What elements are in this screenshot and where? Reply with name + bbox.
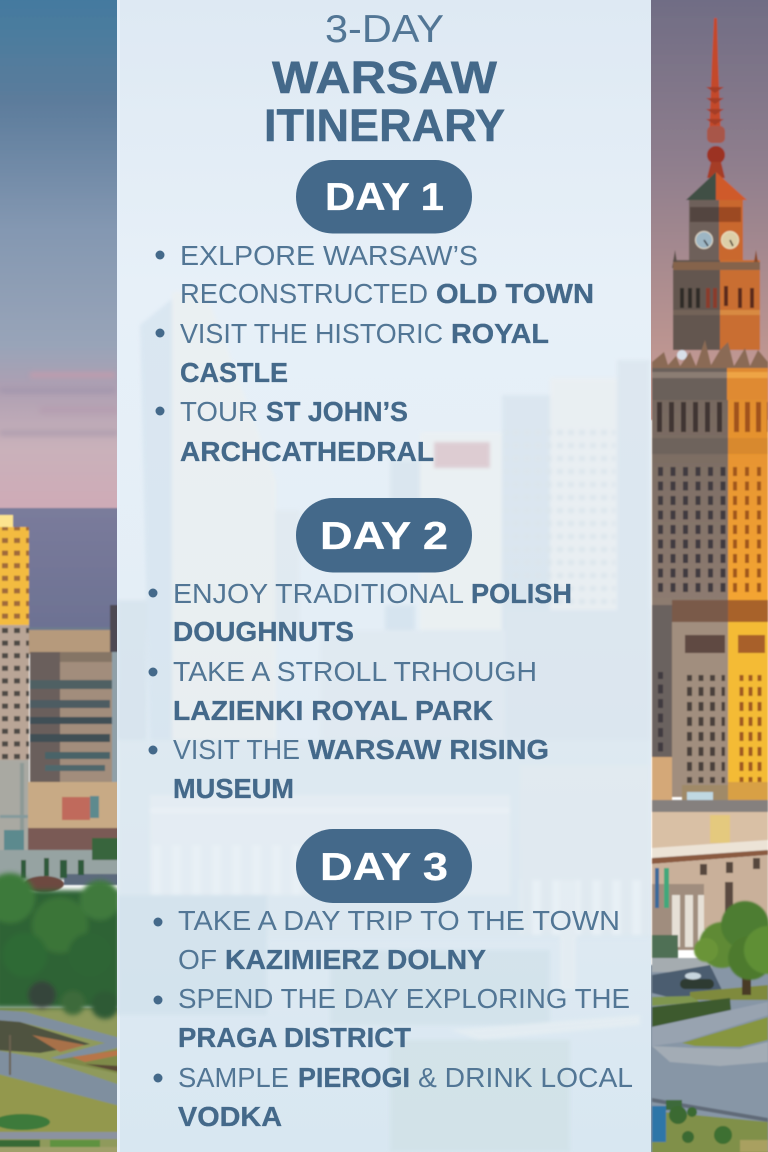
list item: doughnuts: POLISH xyxy=(471,578,572,609)
mid ledge xyxy=(672,600,728,622)
main tower body xyxy=(652,400,728,605)
translucent panel with faded skyline xyxy=(117,0,651,1152)
icon: tower clocks xyxy=(696,232,738,248)
list item: lazienki park: TAKE A STROLL TRHOUGH xyxy=(173,656,537,687)
photo: left side of the Warsaw skyline xyxy=(0,0,120,1152)
list item: old town: OLD TOWN xyxy=(436,278,594,309)
list item: pierogi and vodka: PIEROGI xyxy=(298,1062,410,1093)
upper path and flower beds xyxy=(0,1010,120,1060)
list item: old town xyxy=(156,240,594,309)
list item: pierogi and vodka: SAMPLE xyxy=(178,1062,289,1093)
day 1 list xyxy=(156,240,594,467)
day 2 badge xyxy=(296,498,472,572)
day 1 badge xyxy=(296,160,472,234)
day 2 badge: DAY 2 xyxy=(320,515,448,558)
list item: praga district xyxy=(154,983,630,1053)
plinth xyxy=(652,800,768,813)
tree xyxy=(694,901,768,995)
clock crown xyxy=(686,172,718,200)
title: 3-DAY xyxy=(325,8,444,51)
day 2 list xyxy=(148,578,572,804)
faded skyline xyxy=(117,290,651,1152)
list item: pierogi and vodka: VODKA xyxy=(178,1101,282,1132)
lower tower block xyxy=(672,622,728,797)
day 1 badge: DAY 1 xyxy=(325,176,444,219)
list item: praga district: PRAGA DISTRICT xyxy=(178,1022,411,1053)
day 3 badge: DAY 3 xyxy=(320,846,448,889)
list item: kazimierz dolny: KAZIMIERZ DOLNY xyxy=(225,944,486,975)
list item: royal castle: CASTLE xyxy=(180,357,288,388)
spire xyxy=(706,18,725,178)
list item: lazienki park: LAZIENKI ROYAL PARK xyxy=(173,695,493,726)
day 3 list xyxy=(154,905,633,1132)
list item: kazimierz dolny xyxy=(154,905,620,975)
road and lawns xyxy=(645,965,768,1152)
list item: archcathedral xyxy=(156,396,434,467)
title: WARSAW xyxy=(272,52,498,103)
list item: doughnuts xyxy=(148,578,572,647)
list item: rising museum: WARSAW RISING xyxy=(308,734,549,765)
title xyxy=(264,8,505,151)
list item: royal castle: VISIT THE HISTORIC xyxy=(180,318,443,349)
list item: archcathedral: ST JOHN’S xyxy=(266,396,408,427)
list item: rising museum: MUSEUM xyxy=(173,773,294,804)
list item: old town: RECONSTRUCTED xyxy=(180,278,428,309)
list item: lazienki park xyxy=(148,656,537,726)
list item: doughnuts: DOUGHNUTS xyxy=(173,616,354,647)
list item: pierogi and vodka xyxy=(154,1062,633,1132)
list item: royal castle: ROYAL xyxy=(451,318,549,349)
list item: old town: EXLPORE WARSAW’S xyxy=(180,240,478,271)
day 3 badge xyxy=(296,829,472,903)
title: ITINERARY xyxy=(264,100,505,151)
photo: Palace of Culture and Science tower on the right xyxy=(645,0,768,1152)
list item: rising museum: VISIT THE xyxy=(173,734,300,765)
list item: rising museum xyxy=(148,734,549,804)
list item: kazimierz dolny: TAKE A DAY TRIP TO THE TOWN xyxy=(178,905,620,936)
list item: archcathedral: ARCHCATHEDRAL xyxy=(180,436,434,467)
list item: praga district: SPEND THE DAY EXPLORING THE xyxy=(178,983,630,1014)
trees xyxy=(0,873,120,1019)
list item: doughnuts: ENJOY TRADITIONAL xyxy=(173,578,464,609)
list item: kazimierz dolny: OF xyxy=(178,944,217,975)
list item: archcathedral: TOUR xyxy=(180,396,258,427)
list item: pierogi and vodka: & DRINK LOCAL xyxy=(418,1062,633,1093)
list item: royal castle xyxy=(156,318,549,388)
